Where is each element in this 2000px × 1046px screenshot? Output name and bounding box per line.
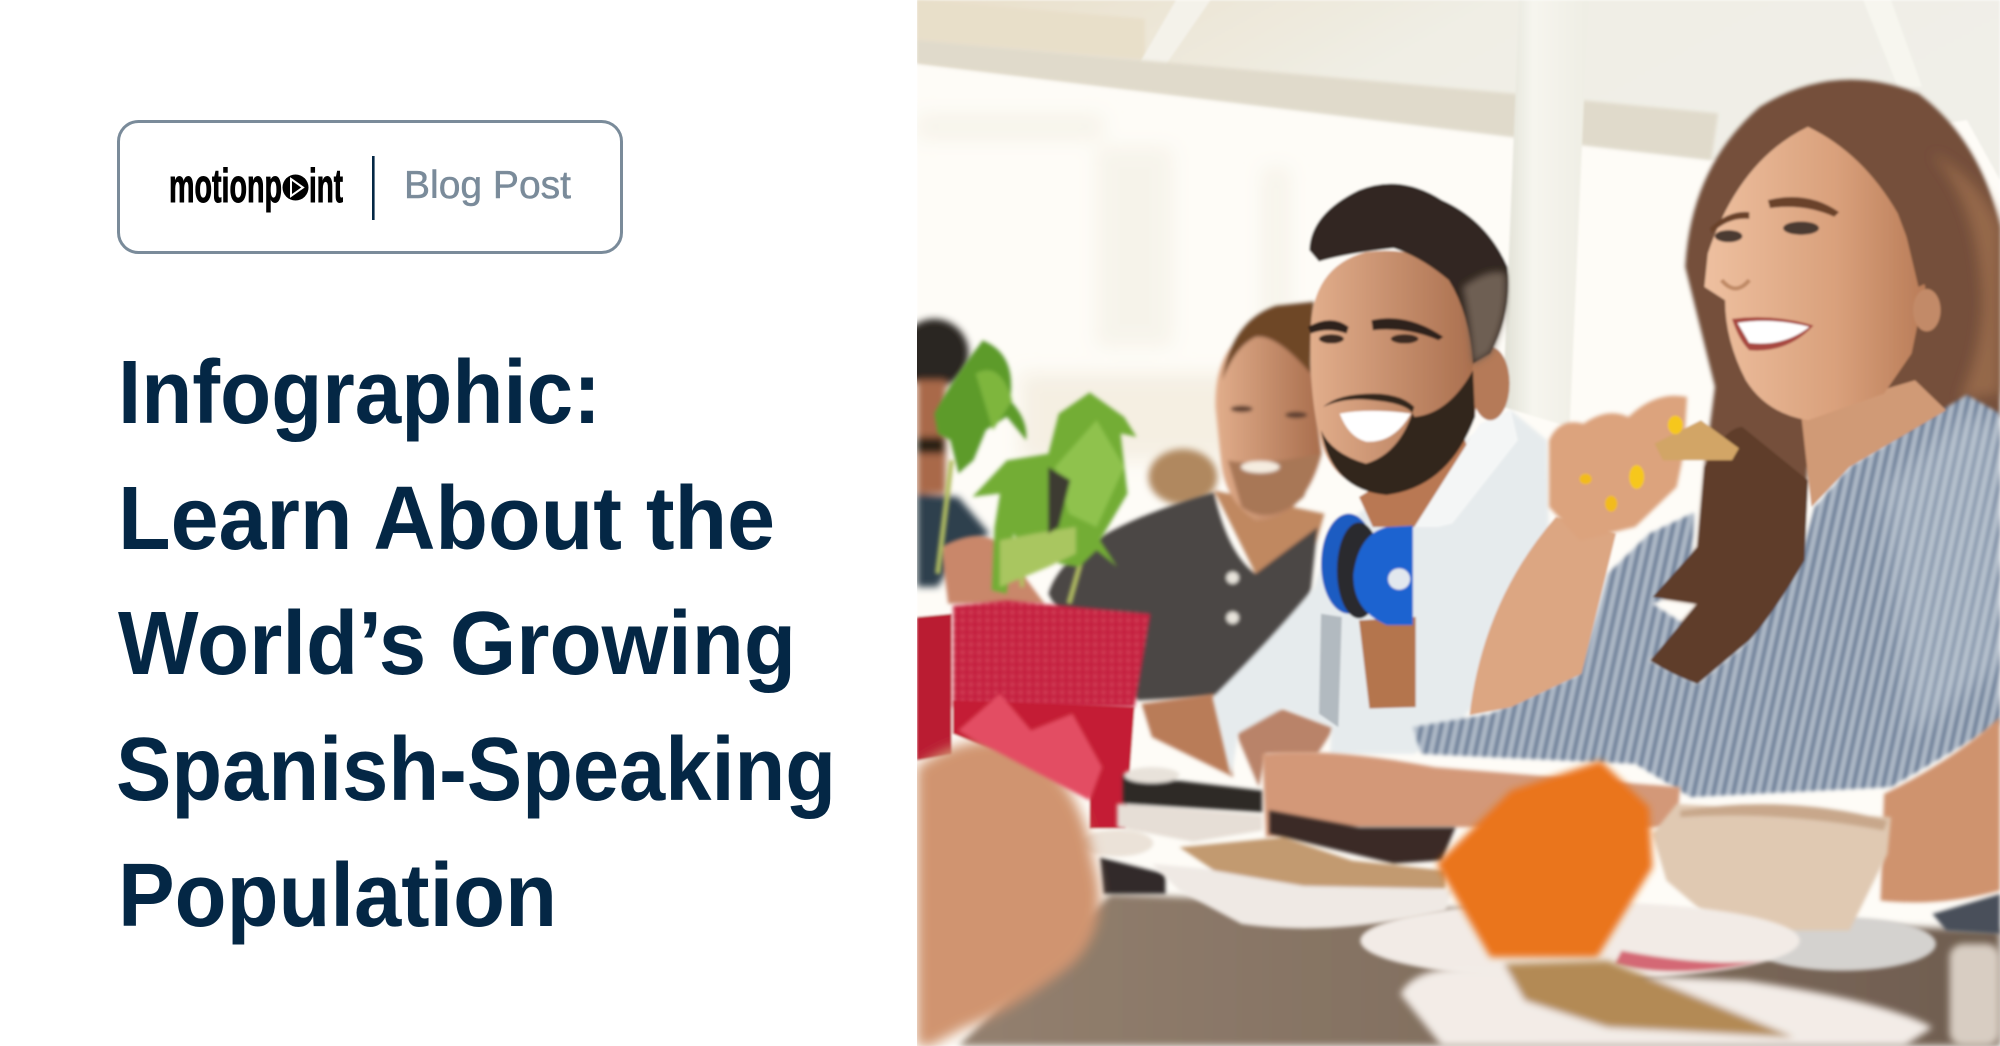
face bbox=[1311, 251, 1480, 494]
hand with biscuit bbox=[1549, 396, 1687, 540]
hair front strands bbox=[1651, 427, 1808, 684]
title: World’s Growing bbox=[118, 594, 796, 694]
hair bbox=[1309, 184, 1508, 364]
neck bbox=[1801, 380, 1946, 507]
front plate with food bbox=[1400, 944, 2000, 1046]
plant bbox=[934, 340, 1137, 604]
shirt bbox=[1413, 395, 2000, 797]
title: Infographic: bbox=[118, 343, 601, 443]
photo: friends smiling at a cafe table bbox=[917, 0, 2000, 1046]
title: Spanish-Speaking bbox=[116, 720, 836, 820]
title bbox=[116, 343, 836, 946]
photo scene bbox=[900, 0, 2000, 1046]
hair back bbox=[1649, 79, 2000, 684]
cup of coffee bbox=[1653, 804, 1936, 971]
label: Blog Post: Blog Post bbox=[404, 164, 571, 207]
shirt bbox=[1213, 410, 1549, 777]
center man with blue headphones bbox=[1141, 184, 1549, 787]
woman in striped shirt bbox=[1413, 79, 2000, 797]
plate with cake bbox=[1152, 811, 1456, 928]
logo: motionpoint: motionp bbox=[169, 159, 282, 212]
background: ceiling, window and column bbox=[917, 0, 2000, 460]
forearm and hand bbox=[1141, 694, 1335, 787]
man in grey shirt bbox=[1048, 302, 1325, 700]
foreground arms bbox=[1262, 717, 2000, 934]
foreground hand bbox=[917, 740, 1100, 1046]
face bbox=[1704, 127, 1925, 420]
small plates behind bbox=[1081, 767, 1262, 894]
panel: left text panel bbox=[116, 120, 836, 946]
headphones bbox=[1321, 514, 1413, 625]
plate under muffin bbox=[1360, 902, 1800, 979]
red napkin bbox=[958, 694, 1102, 801]
title: Learn About the bbox=[118, 469, 775, 569]
arm bbox=[1470, 517, 1616, 715]
hand behind plant bbox=[941, 536, 1045, 604]
red pots bbox=[917, 600, 1150, 829]
table surface bbox=[958, 894, 2000, 1046]
beard bbox=[1321, 370, 1475, 495]
background woman hair bbox=[1148, 449, 1217, 505]
orange muffin bbox=[1436, 760, 1653, 957]
logo: motionpoint: int bbox=[309, 159, 343, 212]
title: Population bbox=[118, 846, 557, 946]
far-left man bbox=[900, 319, 990, 587]
badge: logo and blog post label bbox=[118, 122, 622, 252]
